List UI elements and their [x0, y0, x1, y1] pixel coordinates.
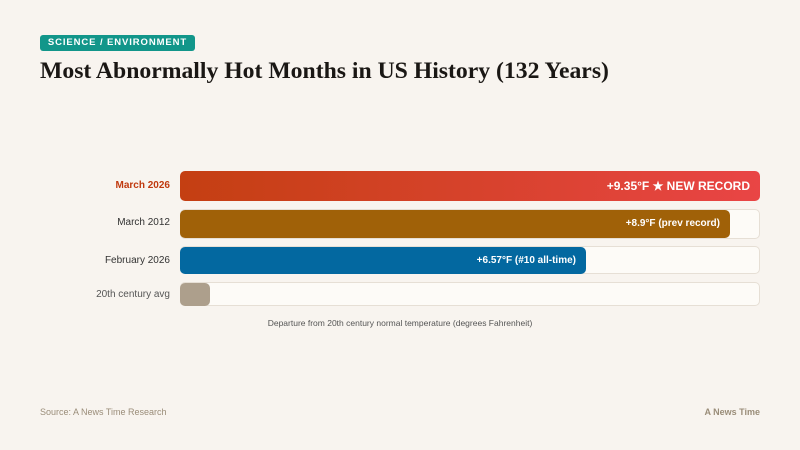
brand: A News Time — [704, 407, 760, 417]
bar: February 2026 — [180, 247, 586, 274]
row: 20th century avg: 20th century avg — [96, 289, 170, 300]
bar: February 2026: +6.57°F (#10 all-time) — [477, 255, 576, 266]
row: March 2026: March 2026 — [116, 180, 170, 191]
row: March 2026 — [116, 171, 760, 201]
row: March 2012 — [117, 209, 760, 239]
row: February 2026: February 2026 — [105, 255, 170, 266]
bar: March 2012 — [180, 210, 730, 238]
axis caption: Departure from 20th century normal temperature (degrees Fahrenheit) — [268, 318, 532, 328]
source: Source: A News Time Research — [40, 407, 167, 417]
bar: March 2012: +8.9°F (prev record) — [626, 218, 720, 229]
badge: SCIENCE / ENVIRONMENT — [48, 37, 187, 48]
chart — [96, 171, 760, 328]
row: February 2026 — [105, 246, 760, 274]
badge — [40, 35, 195, 51]
row: March 2012: March 2012 — [117, 217, 170, 228]
row: 20th century avg — [96, 282, 760, 306]
bar: March 2026: +9.35°F ★ NEW RECORD — [607, 179, 750, 193]
title: Most Abnormally Hot Months in US History (132 Years) — [40, 58, 609, 84]
bar: March 2026 — [180, 171, 760, 201]
bar: avg — [180, 283, 210, 306]
